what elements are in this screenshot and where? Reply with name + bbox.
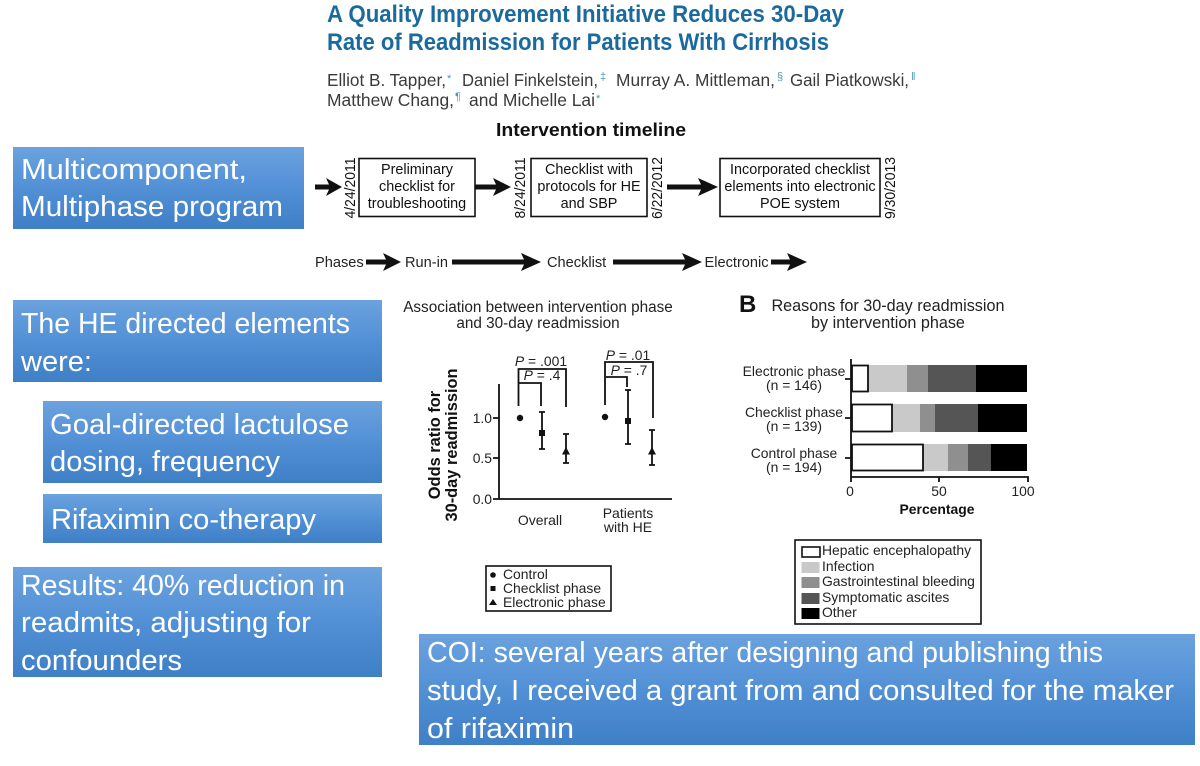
- box: preliminary checklist: checklist for: [379, 179, 455, 195]
- authors: [327, 70, 916, 110]
- authors: §: [777, 71, 783, 83]
- legend: [795, 540, 981, 624]
- authors: *: [596, 93, 601, 105]
- x tick labels: 50: [931, 483, 947, 499]
- panel: results callout: Results: 40% reduction in: [21, 570, 345, 602]
- y tick labels: [473, 410, 492, 507]
- panel: conflict of interest callout: [419, 634, 1195, 745]
- phases row: Electronic: [704, 255, 769, 271]
- date: checklist end: 6/22/2012: [649, 157, 666, 219]
- box: checklist protocols: and SBP: [561, 196, 617, 212]
- panel: HE directed elements callout: were:: [20, 346, 92, 378]
- x labels: Overall: [518, 512, 562, 528]
- axes: [493, 384, 672, 500]
- box: checklist protocols: protocols for HE: [537, 179, 641, 195]
- authors: *: [447, 73, 452, 85]
- chart title: and 30-day readmission: [456, 315, 620, 332]
- panel: rifaximin callout: [43, 494, 382, 543]
- p values: P = .001: [515, 353, 567, 369]
- arrow: to checklist: [475, 178, 511, 196]
- panel: conflict of interest callout: of rifaximin: [427, 713, 574, 745]
- box: preliminary checklist: Preliminary: [381, 162, 454, 178]
- phases row: Checklist: [547, 255, 606, 271]
- category labels: (n = 194): [766, 459, 822, 475]
- intervention timeline: [315, 120, 899, 219]
- arrow: to electronic: [667, 178, 718, 196]
- authors: ‡: [600, 71, 606, 83]
- authors: and Michelle Lai: [469, 90, 595, 110]
- panel: multicomponent callout: [13, 147, 304, 229]
- chart title: [771, 297, 1005, 332]
- title: A Quality Improvement Initiative Reduces 30-Day: [327, 1, 844, 28]
- category labels: Control phase: [751, 445, 838, 461]
- category labels: Electronic phase: [743, 363, 846, 379]
- category labels: [743, 363, 846, 475]
- axes: [845, 359, 1028, 482]
- x labels: with HE: [603, 519, 652, 535]
- authors: Murray A. Mittleman,: [616, 70, 775, 90]
- chart title: by intervention phase: [811, 314, 965, 332]
- chart title: Association between intervention phase: [403, 299, 673, 316]
- authors: Gail Piatkowski,: [790, 70, 909, 90]
- legend: Infection: [822, 558, 875, 574]
- legend: Electronic phase: [503, 594, 606, 610]
- y axis title: [426, 368, 461, 522]
- panel: lactulose callout: dosing, frequency: [50, 446, 281, 478]
- y tick labels: 0.5: [473, 450, 492, 466]
- box: preliminary checklist: [359, 158, 475, 216]
- box: electronic POE: Incorporated checklist: [730, 162, 870, 178]
- category labels: Checklist phase: [745, 404, 843, 420]
- panel: lactulose callout: Goal-directed lactulose: [50, 409, 349, 441]
- legend: Control: [503, 566, 548, 582]
- title: Rate of Readmission for Patients With Cirrhosis: [327, 29, 829, 56]
- authors: ¶: [455, 91, 461, 103]
- panel: lactulose callout: [43, 401, 382, 483]
- y tick labels: 0.0: [473, 491, 492, 507]
- x tick labels: [846, 483, 1035, 499]
- y tick labels: 1.0: [473, 410, 492, 426]
- phases row: Run-in: [405, 255, 448, 271]
- legend: Gastrointestinal bleeding: [822, 573, 975, 589]
- x tick labels: 100: [1011, 483, 1035, 499]
- legend: Other: [822, 604, 857, 620]
- authors: Daniel Finkelstein,: [462, 70, 598, 90]
- panel: HE directed elements callout: The HE directed elements: [21, 308, 350, 340]
- bar: control phase: [852, 444, 1027, 471]
- panel letter: B: [739, 291, 756, 318]
- legend: Hepatic encephalopathy: [822, 542, 971, 558]
- date: start: 4/24/2011: [342, 158, 359, 218]
- authors: Matthew Chang,: [327, 90, 454, 110]
- category labels: (n = 139): [766, 418, 822, 434]
- panel: results callout: confounders: [21, 645, 182, 677]
- chart title: [403, 299, 673, 332]
- box: electronic POE: POE system: [760, 196, 840, 212]
- x labels: [518, 505, 653, 535]
- p values: [515, 347, 650, 383]
- arrow: timeline start: [315, 178, 342, 196]
- panel: conflict of interest callout: COI: several years after designing and publishing this: [427, 637, 1103, 669]
- p values: P = .4: [524, 367, 561, 383]
- data points and error bars: [517, 390, 656, 465]
- timeline heading: Intervention timeline: [496, 120, 686, 140]
- panel: results callout: readmits, adjusting for: [21, 607, 312, 639]
- phases row: Phases: [315, 255, 364, 271]
- bar: checklist phase: [852, 404, 1027, 432]
- significance brackets: [518, 362, 653, 418]
- x labels: Patients: [603, 505, 653, 521]
- panel: HE directed elements callout: [13, 300, 382, 382]
- chart: reasons for readmission: [739, 291, 1035, 624]
- bar: electronic phase: [852, 365, 1027, 392]
- p values: P = .01: [606, 347, 650, 363]
- p values: P = .7: [611, 362, 648, 378]
- title: [327, 1, 844, 56]
- panel: results callout: [13, 567, 382, 677]
- phases row: [315, 253, 807, 271]
- legend: [486, 566, 611, 611]
- legend: Checklist phase: [503, 580, 601, 596]
- legend: Symptomatic ascites: [822, 589, 949, 605]
- date: end: 9/30/2013: [882, 157, 899, 219]
- authors: Elliot B. Tapper,: [327, 70, 446, 90]
- panel: conflict of interest callout: study, I received a grant from and consulted for the maker: [427, 675, 1175, 707]
- panel: multicomponent callout: Multicomponent,: [21, 154, 247, 186]
- box: electronic POE: [720, 158, 880, 216]
- panel: rifaximin callout: Rifaximin co-therapy: [51, 504, 317, 536]
- x tick labels: 0: [846, 483, 854, 499]
- y axis title: 30-day readmission: [443, 368, 461, 522]
- box: electronic POE: elements into electronic: [724, 179, 876, 195]
- y axis title: Odds ratio for: [426, 390, 444, 499]
- chart title: Reasons for 30-day readmission: [771, 297, 1005, 315]
- date: checklist start: 8/24/2011: [512, 158, 529, 218]
- x axis title: Percentage: [900, 501, 975, 517]
- box: checklist protocols: Checklist with: [545, 162, 633, 178]
- panel: multicomponent callout: Multiphase program: [21, 191, 283, 223]
- box: preliminary checklist: troubleshooting: [368, 196, 466, 212]
- authors: ‖: [911, 71, 916, 83]
- chart: odds ratio by phase: [403, 299, 673, 611]
- category labels: (n = 146): [766, 377, 822, 393]
- box: checklist protocols: [531, 158, 647, 216]
